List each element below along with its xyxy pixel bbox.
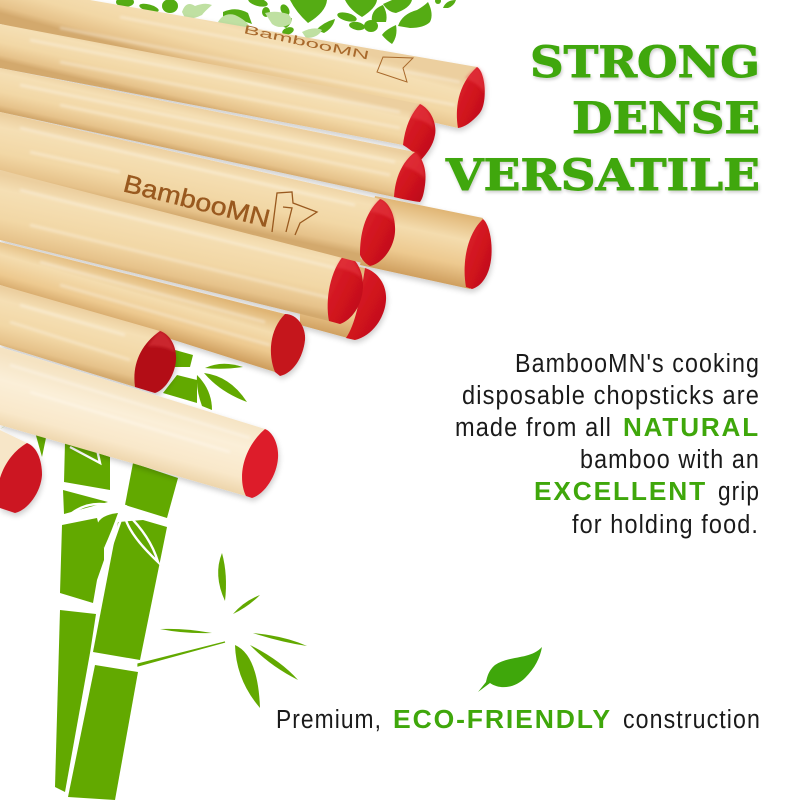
brand engraving: top chopstick <box>242 22 413 82</box>
chopstick: lower long <box>0 242 305 376</box>
bamboo leaves: upper <box>0 364 247 457</box>
chopstick: middle branded <box>0 112 395 266</box>
description text: NATURAL <box>623 414 760 442</box>
description text: made from all <box>455 414 612 442</box>
bamboo leaves on stalk <box>64 445 158 603</box>
bamboo illustration <box>0 350 307 800</box>
heading: DENSE <box>572 94 760 144</box>
chopsticks bundle <box>0 0 492 513</box>
chopstick: third <box>0 68 426 202</box>
bamboo stalk: left <box>55 442 110 792</box>
description text: disposable chopsticks are <box>462 382 760 410</box>
description text: bamboo with an <box>580 446 760 474</box>
brand engraving: middle chopstick <box>121 170 317 235</box>
eco-friendly caption <box>276 706 761 734</box>
bamboo leaves: floating sprig <box>138 553 307 708</box>
description text: EXCELLENT <box>534 478 707 506</box>
chopstick: back right <box>360 196 492 289</box>
description text: grip <box>718 478 760 506</box>
heading: VERSATILE <box>445 151 760 201</box>
description text: BambooMN's cooking <box>515 350 760 378</box>
brand engraving: top chopstick: BambooMN <box>242 22 370 62</box>
heading: STRONG <box>530 38 760 88</box>
chopstick: front large <box>0 347 278 498</box>
chopstick: second <box>0 24 435 160</box>
chopstick: back middle <box>300 255 386 340</box>
eco-friendly caption: construction <box>623 706 761 734</box>
top leaf canopy <box>116 0 456 44</box>
chopstick: bottom left end <box>0 430 42 513</box>
brand engraving: middle chopstick: BambooMN <box>121 170 273 233</box>
chopstick: short <box>0 285 176 393</box>
heading <box>445 38 760 201</box>
description text <box>455 350 760 539</box>
description text: for holding food. <box>572 511 759 539</box>
bamboo stalk: front <box>68 350 197 800</box>
chopstick: front pale <box>0 170 363 324</box>
eco-friendly caption: ECO-FRIENDLY <box>393 706 612 734</box>
chopstick: top with brand mark <box>0 0 485 128</box>
icon: leaf <box>478 647 542 692</box>
eco-friendly caption: Premium, <box>276 706 382 734</box>
